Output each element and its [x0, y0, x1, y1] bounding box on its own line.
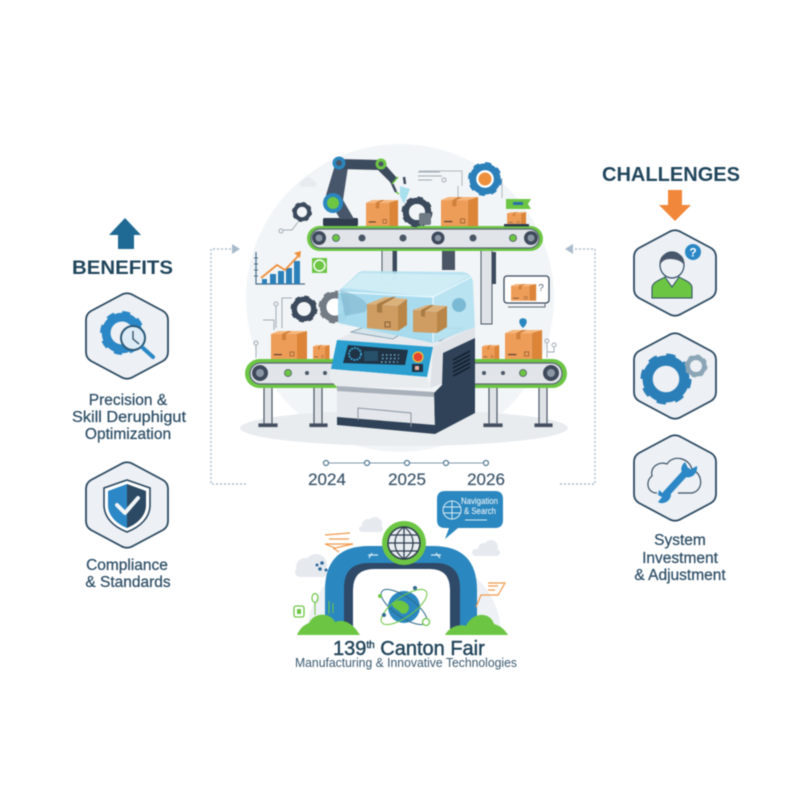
label: Compliance [86, 557, 168, 574]
right conveyor legs [484, 386, 552, 426]
bar and line chart [254, 251, 305, 284]
machine top deck [337, 326, 475, 348]
icon: person with question: ? [689, 246, 697, 260]
hexagon badge [634, 230, 716, 316]
location pin and circuit right [520, 319, 556, 358]
machine drawer [358, 408, 411, 427]
robot arm [323, 156, 410, 226]
timeline [308, 460, 505, 489]
gear: top left [293, 203, 311, 221]
orange arrow right [476, 583, 505, 607]
dotted connector: right [560, 244, 595, 484]
dotted connector: left [211, 244, 246, 484]
icon: gears [644, 356, 706, 401]
top conveyor supports [382, 234, 496, 324]
machine white band [330, 369, 430, 388]
label: Optimization [85, 426, 171, 443]
control screen [343, 345, 408, 365]
gear: blue with orange hub [470, 164, 500, 194]
fair subtitle: Manufacturing & Innovative Technologies [295, 656, 517, 670]
glass dome [338, 271, 475, 343]
timeline: 2025 [388, 470, 426, 489]
challenge: system [634, 333, 716, 419]
boxes on top conveyor [366, 200, 398, 226]
hexagon badge [86, 462, 168, 548]
earth with orbits [376, 583, 432, 631]
benefits arrow [109, 218, 141, 249]
top conveyor belt [307, 226, 543, 251]
speech bubble [437, 491, 503, 539]
hexagon badge [634, 435, 716, 521]
hexagon badge [634, 333, 716, 419]
speech bubble: & Search [464, 506, 496, 517]
machine lower front [337, 387, 435, 434]
label: Precision & [89, 392, 168, 409]
icon: gear with magnifier [103, 314, 153, 357]
canton fair gate [294, 491, 508, 635]
left conveyor legs [259, 386, 327, 426]
benefits heading: BENEFITS [72, 257, 173, 279]
icon: cloud and wrench [648, 458, 701, 503]
ground shadow [240, 410, 568, 446]
challenges heading: CHALLENGES [602, 163, 740, 186]
orange speed lines left [325, 533, 353, 552]
challenges arrow [659, 190, 691, 221]
arch dark inner [344, 563, 460, 632]
central illustration: production line [245, 156, 567, 434]
icon: shield [104, 480, 150, 532]
clouds [295, 517, 500, 577]
machine base [337, 417, 435, 434]
monitor with box: ? [538, 283, 544, 294]
plants and badge left [294, 594, 333, 617]
monitor with box [504, 276, 549, 307]
boxes on lower conveyors [271, 331, 307, 359]
pale backdrop [307, 552, 501, 635]
box under glass: large [367, 297, 407, 331]
label: System [654, 532, 706, 549]
arch blue outer [325, 546, 477, 632]
small tagged box stand [504, 199, 531, 226]
faint cloud [300, 177, 316, 188]
bushes left [297, 615, 360, 635]
timeline: 2026 [467, 470, 505, 489]
green status square [312, 258, 327, 273]
right conveyor belt [457, 359, 567, 388]
gears: middle left [292, 293, 349, 321]
bushes right [445, 615, 508, 635]
challenge: people [634, 230, 716, 316]
blue dots [316, 561, 328, 572]
circuit lines left [254, 298, 292, 358]
inspection machine [330, 271, 475, 434]
arch opening [353, 568, 450, 635]
benefit: compliance [85, 462, 171, 591]
scale trays [351, 325, 412, 339]
timeline: 2024 [308, 470, 346, 489]
machine control panel [331, 340, 433, 377]
label: & Adjustment [634, 567, 726, 584]
data readout lines [279, 171, 502, 233]
left conveyor belt [245, 359, 355, 388]
speech bubble: Navigation [461, 496, 498, 507]
fair title: 139 [333, 638, 366, 660]
machine dark side [434, 338, 475, 434]
globe badge [382, 521, 426, 565]
background disc [246, 144, 554, 452]
challenge: investment [634, 435, 726, 584]
emergency stop button [412, 352, 423, 372]
label: Skill Deruphigut [72, 409, 187, 426]
box under glass: small [413, 305, 447, 333]
label: & Standards [85, 574, 171, 591]
machine side panel [430, 327, 475, 388]
gear: top centre [404, 199, 431, 225]
fair title: Canton Fair [375, 638, 485, 660]
arch white marks [368, 553, 441, 558]
label: Investment [642, 550, 719, 567]
benefit: precision [72, 293, 187, 443]
hexagon badge [86, 293, 168, 379]
fair title: th [366, 640, 375, 651]
